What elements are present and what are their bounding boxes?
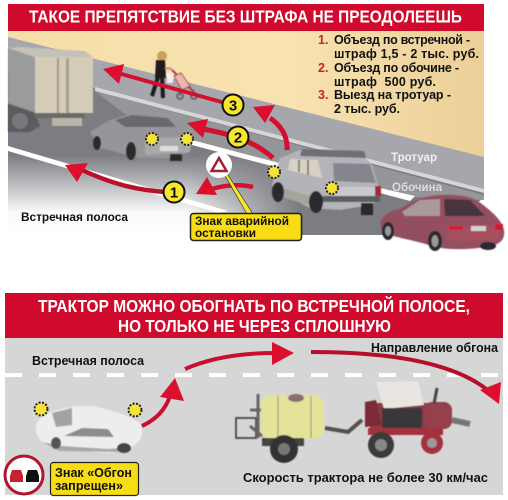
label: oncoming lane bottom: Встречная полоса: [32, 354, 145, 368]
arrow 1: [65, 163, 253, 195]
bottom fade: [8, 155, 298, 236]
arrow 3: [103, 64, 287, 150]
callout: no overtaking label: Знак «Обгон: [55, 465, 132, 480]
gray sedan: [90, 114, 192, 161]
list: fines: штраф 500 руб.: [334, 75, 436, 89]
Niva car: [272, 149, 381, 215]
truck: [8, 47, 93, 132]
icon: Niva hazard lamps: [268, 166, 338, 194]
callout: warning sign label: Знак аварийной: [195, 214, 289, 228]
list: fines: Объезд по обочине -: [334, 61, 459, 75]
lane dashes: [5, 373, 503, 377]
icon: sedan hazard lamps: [146, 133, 193, 145]
header: bottom title: НО ТОЛЬКО НЕ ЧЕРЕЗ СПЛОШНУЮ: [118, 316, 391, 336]
label: tractor speed: Скорость трактора не более 30 км/час: [243, 471, 488, 485]
marker 2: 2: [234, 130, 242, 146]
shoulder band: [95, 91, 484, 200]
white car: [36, 406, 142, 453]
marker 3: 3: [229, 98, 237, 114]
callout: no overtaking label: [50, 462, 138, 496]
arrow 2: [187, 119, 273, 158]
label: oncoming lane top: Встречная полоса: [21, 210, 128, 224]
marker 1: 1: [170, 184, 178, 202]
list: fines: Объезд по встречной -: [334, 33, 470, 47]
marker 1: [164, 182, 184, 202]
list: fines: 3.: [318, 88, 328, 102]
road edge line right: [192, 140, 287, 170]
panel: tractor overtaking scene: [5, 338, 503, 495]
label: shoulder: Обочина: [392, 180, 442, 194]
list: fines: штраф 1,5 - 2 тыс. руб.: [334, 47, 479, 61]
beige background: [8, 31, 484, 161]
centre line: [8, 146, 228, 213]
header: bottom title: [5, 293, 503, 338]
label: sidewalk: Тротуар: [391, 150, 437, 164]
arrow: pull out: [142, 378, 184, 426]
arrow: return: [311, 352, 501, 404]
icon: no overtaking sign: [5, 456, 43, 494]
arrow: pass: [185, 342, 294, 369]
list: fines: 2 тыс. руб.: [334, 102, 400, 116]
callout: warning sign label: [190, 214, 302, 240]
label: overtaking direction: Направление обгона: [371, 341, 499, 355]
icon: white car hazard lamps: [34, 402, 142, 416]
header: top title: [8, 4, 484, 31]
header: top title: ТАКОЕ ПРЕПЯТСТВИЕ БЕЗ ШТРАФА НЕ ПРЕОДОЛЕЕШЬ: [29, 6, 462, 26]
tractor with tank trailer: [236, 381, 470, 463]
callout: no overtaking label: запрещен»: [55, 478, 123, 493]
road surface: [8, 70, 484, 235]
marker 3: [222, 94, 244, 116]
list: fines: 2.: [318, 61, 328, 75]
woman with stroller: [152, 51, 197, 99]
panel: road obstacle scene: [8, 31, 484, 236]
curb line: [95, 87, 484, 193]
sidewalk: [8, 37, 484, 192]
marker 2: [228, 126, 248, 148]
list: fines: [318, 33, 479, 116]
list: fines: 1.: [318, 33, 328, 47]
callout: warning sign label: остановки: [195, 226, 256, 240]
red car: [380, 195, 504, 251]
icon: warning triangle sign: [206, 152, 253, 214]
list: fines: Выезд на тротуар -: [334, 88, 451, 102]
